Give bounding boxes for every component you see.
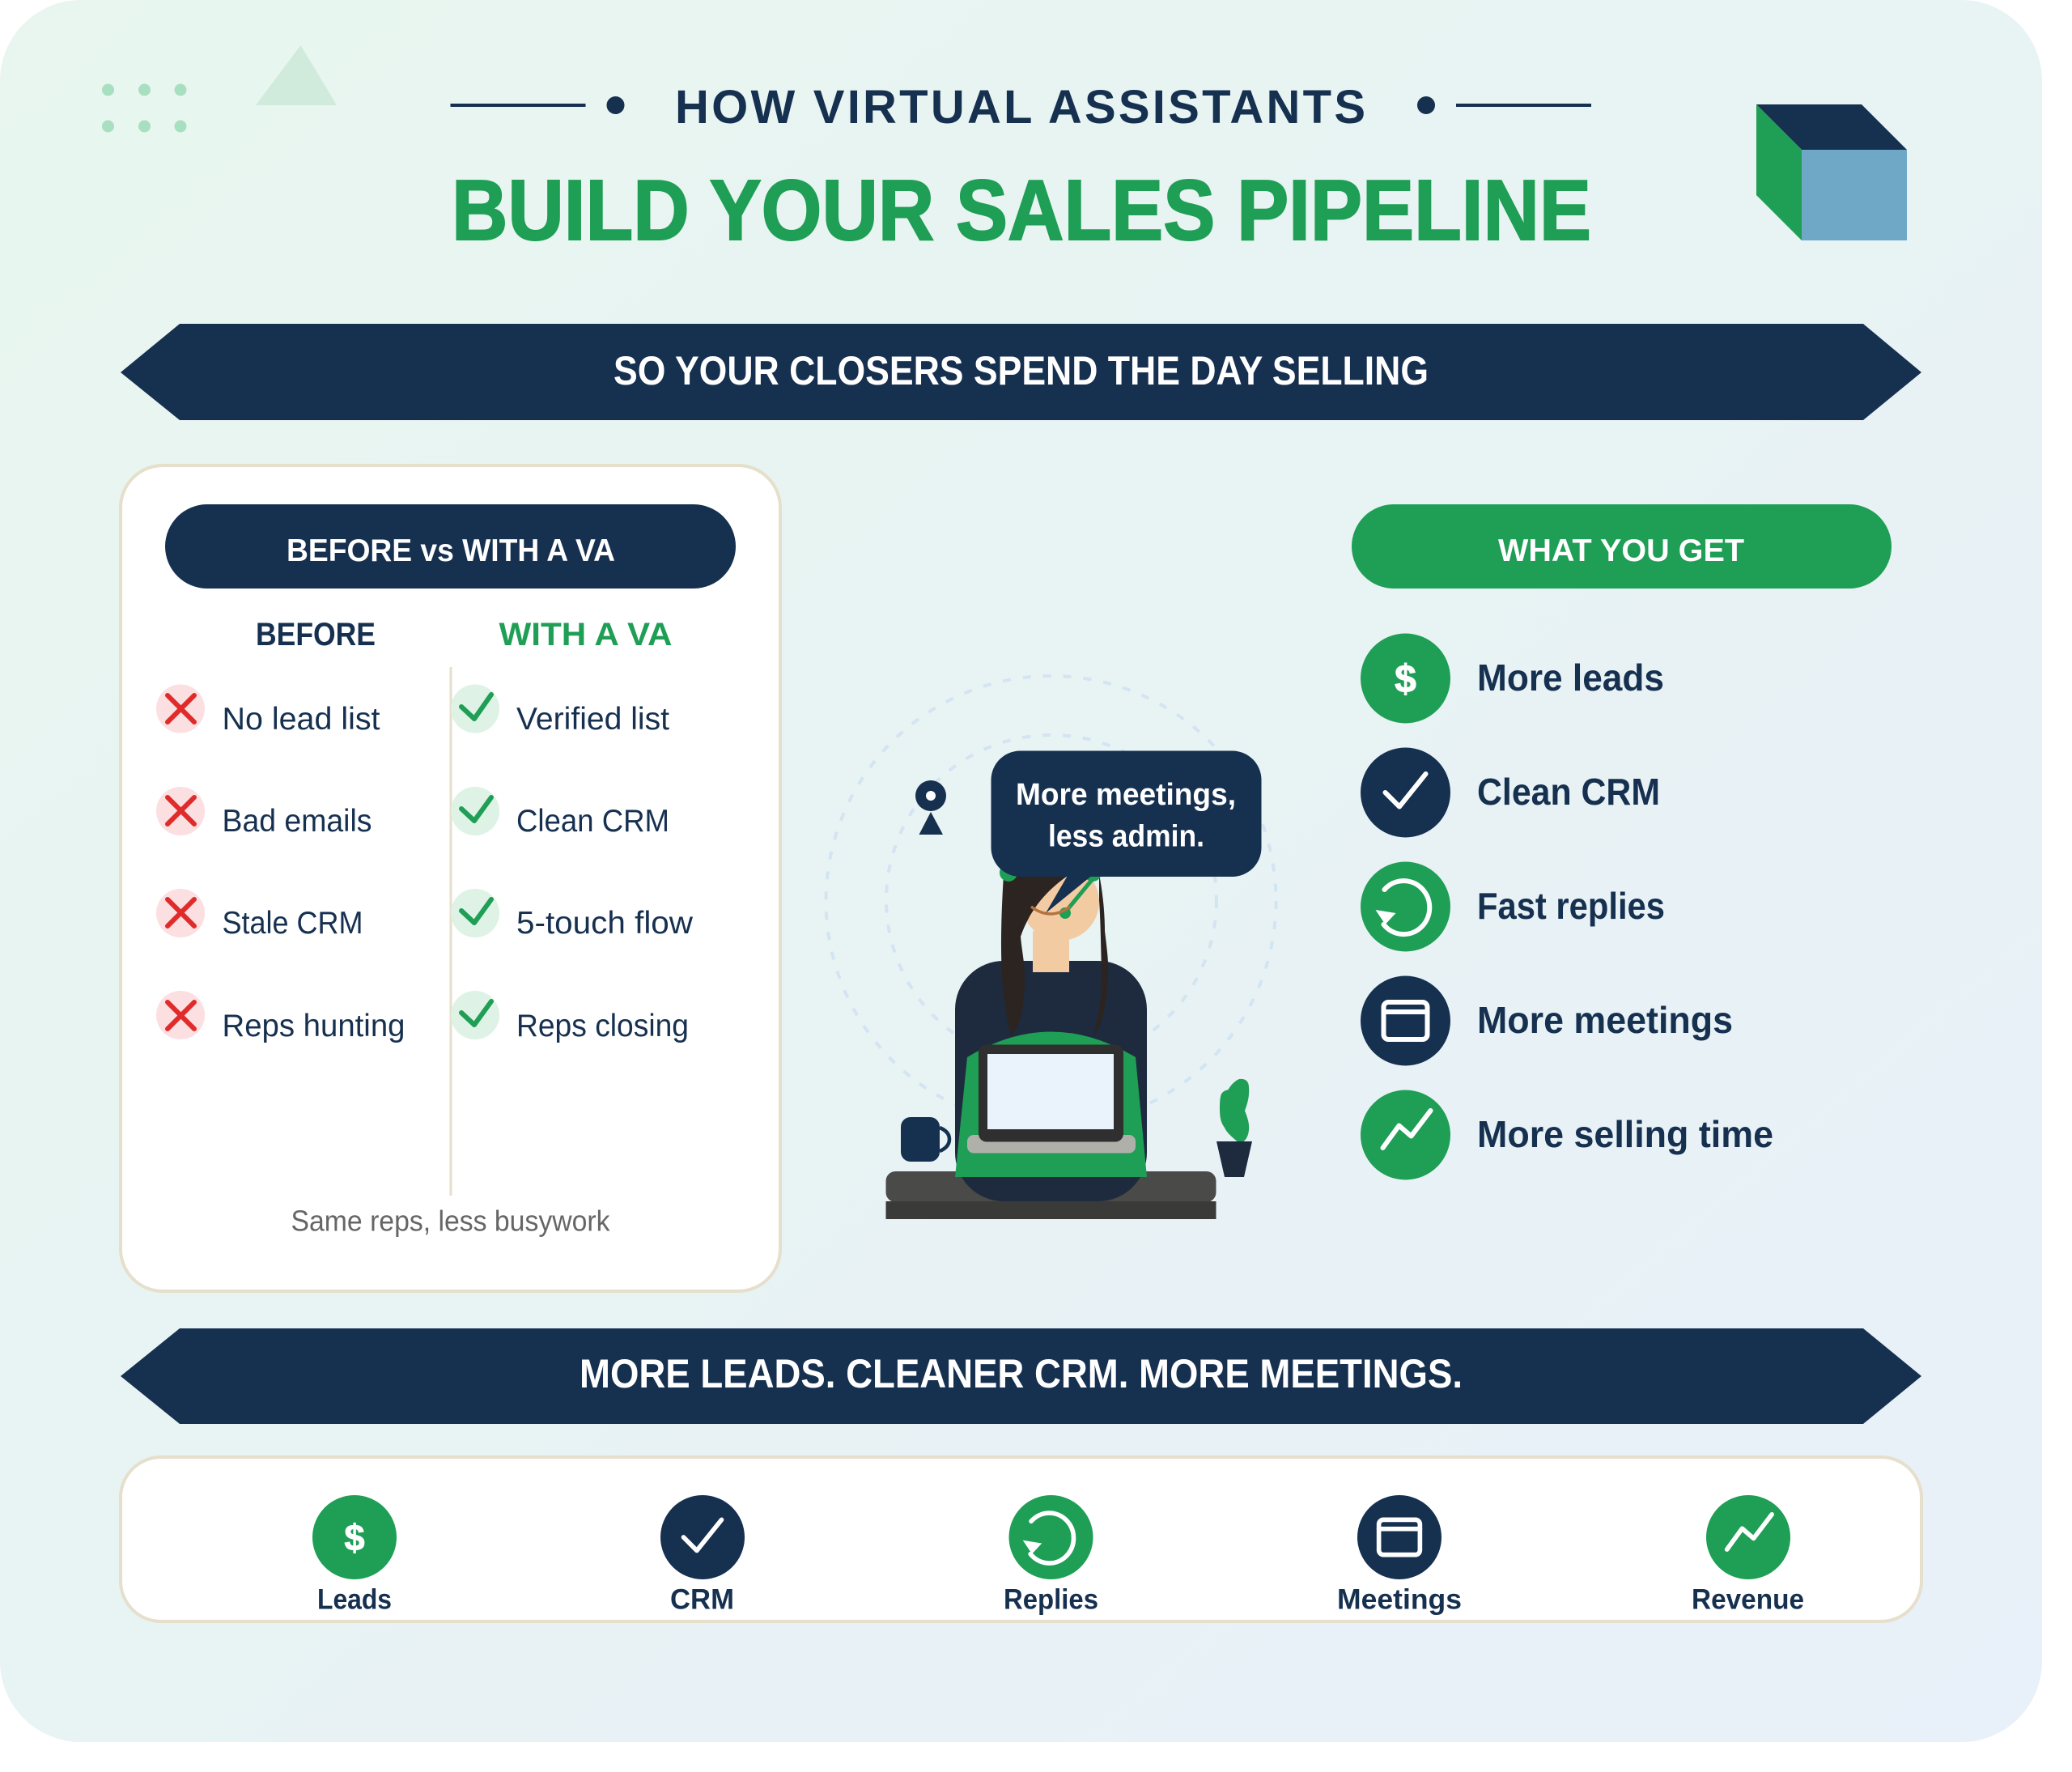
title: kicker line: HOW VIRTUAL ASSISTANTS [675, 81, 1365, 134]
panel heading pill [165, 504, 736, 589]
benefit: more leads: $ [1395, 658, 1416, 701]
bottom ribbon banner [121, 1328, 1921, 1424]
summary: leads: Leads [317, 1583, 392, 1616]
summary: revenue: Revenue [1692, 1583, 1804, 1616]
with a VA row 3: 5-touch flow [516, 906, 694, 941]
benefit: more leads [1361, 633, 1664, 724]
benefit: fast replies: Fast replies [1477, 885, 1665, 927]
summary: revenue [1692, 1495, 1804, 1616]
summary: CRM: CRM [670, 1583, 734, 1616]
icon: coffee mug [901, 1117, 949, 1162]
benefit: more leads: More leads [1477, 657, 1664, 699]
before row 4: Reps hunting [222, 1009, 405, 1043]
illustration: virtual assistant at desk [826, 676, 1276, 1219]
with a VA row 3 [451, 889, 694, 941]
callout: speech bubble: More meetings, [1016, 778, 1236, 812]
with a VA row 1 [451, 685, 669, 737]
panel heading pill: WHAT YOU GET [1498, 533, 1744, 568]
benefit: more meetings: More meetings [1477, 999, 1733, 1041]
benefit: fast replies [1361, 861, 1665, 952]
summary: replies [1004, 1495, 1098, 1616]
decorative triangle [256, 45, 337, 105]
decorative cube [1756, 104, 1907, 240]
before row 1 [156, 685, 380, 737]
with a VA row 2 [451, 787, 669, 839]
panel heading pill: BEFORE vs WITH A VA [287, 533, 615, 568]
benefit: more selling time [1361, 1090, 1773, 1180]
summary: meetings [1337, 1495, 1462, 1616]
summary: leads [312, 1495, 397, 1616]
panel footnote: Same reps, less busywork [291, 1205, 610, 1237]
title: kicker line [450, 81, 1591, 134]
benefit: clean CRM [1361, 748, 1660, 837]
panel heading pill [1352, 504, 1892, 589]
callout: speech bubble: less admin. [1048, 819, 1204, 853]
person [955, 863, 1147, 1201]
column heading: before: BEFORE [256, 617, 376, 652]
with a VA row 4 [451, 991, 689, 1043]
laptop [955, 1031, 1147, 1177]
benefit: clean CRM: Clean CRM [1477, 771, 1660, 813]
summary: replies: Replies [1004, 1583, 1098, 1616]
benefit: more selling time: More selling time [1477, 1113, 1773, 1155]
before row 2 [156, 787, 372, 839]
before row 3 [156, 889, 363, 941]
desk [885, 1171, 1216, 1219]
with a VA row 1: Verified list [516, 702, 669, 737]
top ribbon banner: SO YOUR CLOSERS SPEND THE DAY SELLING [614, 348, 1429, 393]
summary: meetings: Meetings [1337, 1583, 1462, 1616]
before row 3: Stale CRM [222, 906, 363, 941]
decorative dots [102, 84, 186, 133]
with a VA row 2: Clean CRM [516, 804, 669, 839]
panel: summary strip [121, 1457, 1921, 1621]
summary: CRM [660, 1495, 745, 1616]
icon: potted plant [1216, 1079, 1252, 1177]
panel: before vs with a VA [121, 465, 780, 1291]
benefit: more meetings [1361, 976, 1733, 1065]
before row 1: No lead list [222, 702, 380, 737]
with a VA row 4: Reps closing [516, 1009, 689, 1043]
callout: speech bubble [991, 751, 1261, 913]
summary: leads: $ [344, 1517, 365, 1558]
title: main heading: BUILD YOUR SALES PIPELINE [452, 163, 1591, 258]
bottom ribbon banner: MORE LEADS. CLEANER CRM. MORE MEETINGS. [580, 1351, 1463, 1396]
top ribbon banner [121, 324, 1921, 420]
before row 4 [156, 991, 405, 1043]
icon: location pin [915, 780, 946, 835]
column heading: with a VA: WITH A VA [499, 617, 672, 652]
panel: what you get [1352, 504, 1892, 1180]
before row 2: Bad emails [222, 804, 372, 839]
